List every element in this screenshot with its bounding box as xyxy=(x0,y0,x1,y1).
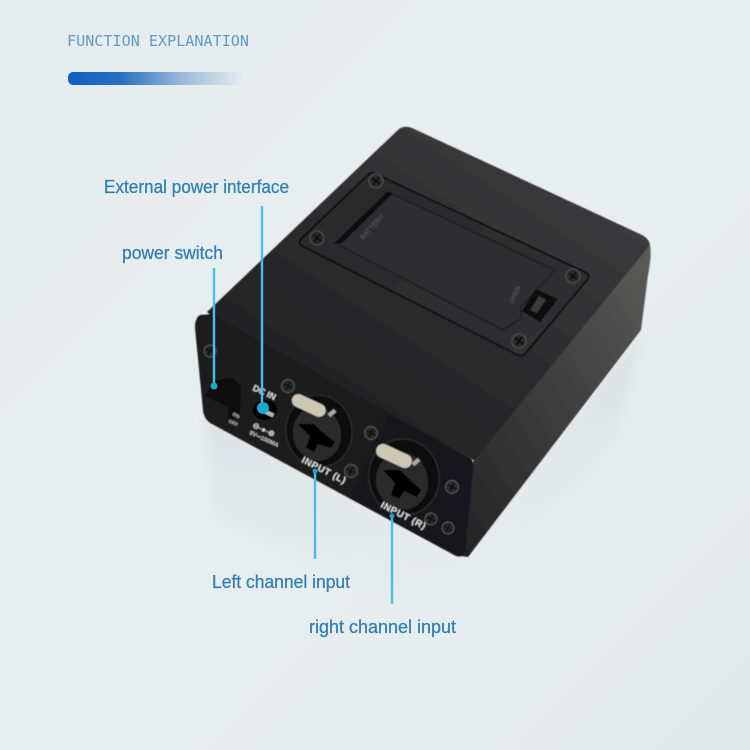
battery cover plate xyxy=(300,173,589,356)
right channel label: right channel input xyxy=(309,617,456,637)
DC input jack xyxy=(248,383,280,449)
left channel leader line xyxy=(314,471,316,559)
device: audio box xyxy=(195,127,651,557)
device top face xyxy=(207,127,650,462)
right jack latch xyxy=(374,442,414,470)
reflection below the device xyxy=(205,335,640,640)
power switch xyxy=(205,378,241,428)
power switch label: power switch xyxy=(122,243,223,263)
callout: left channel input xyxy=(212,468,350,592)
DC IN label: DC IN xyxy=(251,383,278,402)
plate screws xyxy=(310,174,580,348)
callout: power switch xyxy=(122,243,223,390)
external power label: External power interface xyxy=(104,177,289,197)
title: FUNCTION EXPLANATION xyxy=(67,32,249,50)
DC polarity label: ⊖-●-⊕ xyxy=(251,421,277,439)
door slot xyxy=(334,191,392,244)
front panel screws xyxy=(204,345,458,534)
left channel label: Left channel input xyxy=(212,572,350,592)
battery latch xyxy=(522,289,558,322)
right XLR combo jack xyxy=(362,433,446,532)
power switch: OFF xyxy=(227,418,239,428)
left XLR combo jack xyxy=(279,389,359,487)
title accent bar xyxy=(68,72,244,85)
device side face xyxy=(461,245,651,557)
callout: right channel input xyxy=(309,514,456,637)
open label: OPEN xyxy=(508,285,523,305)
external power leader line xyxy=(261,206,263,408)
battery label: BATTERY xyxy=(359,213,386,241)
DC input jack: 9V⎓100MA xyxy=(248,430,280,449)
switch labels: ON xyxy=(231,411,241,420)
power switch leader line xyxy=(213,268,215,386)
battery door outline xyxy=(335,192,555,330)
callout: external power interface xyxy=(104,177,289,414)
INPUT (L) label: INPUT (L) xyxy=(300,455,348,487)
INPUT (R) label: INPUT (R) xyxy=(379,500,428,532)
device front face xyxy=(195,314,473,556)
right channel leader line xyxy=(391,516,393,604)
left jack latch xyxy=(290,392,328,419)
